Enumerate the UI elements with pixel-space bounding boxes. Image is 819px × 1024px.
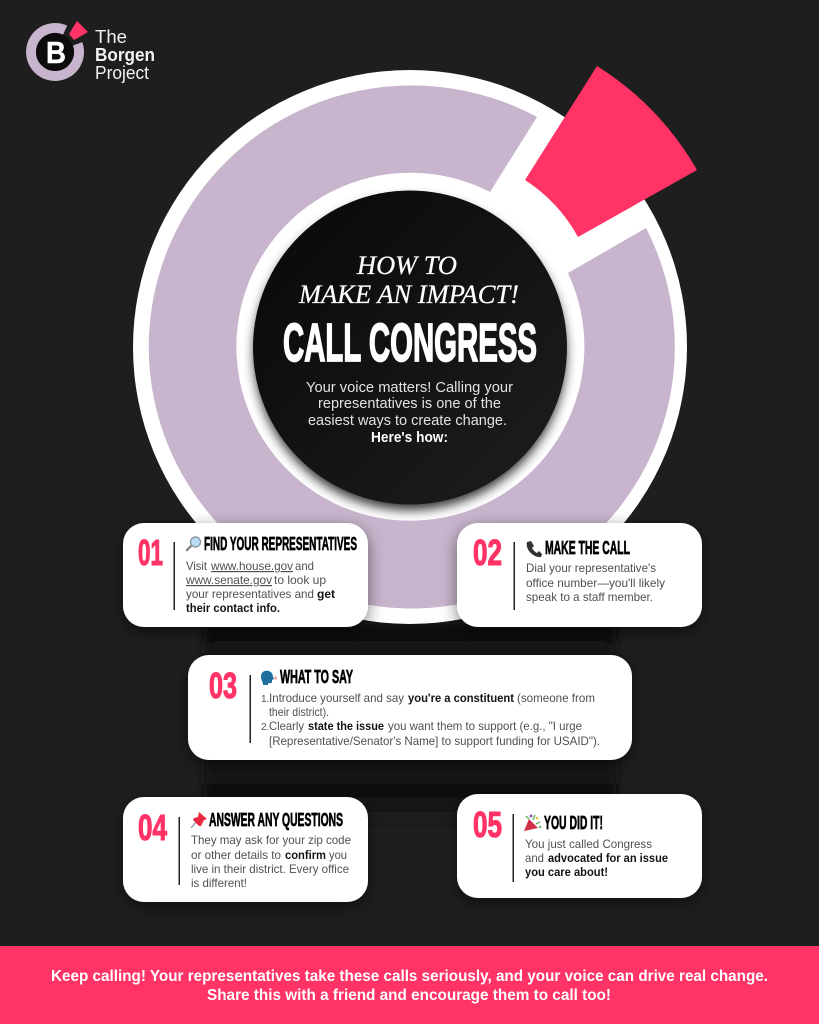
logo wordmark bbox=[95, 27, 155, 83]
numbered list: Introduce yourself and say bbox=[269, 692, 404, 705]
body text bbox=[191, 834, 351, 890]
intro text bbox=[306, 379, 513, 446]
divider bbox=[174, 542, 175, 610]
body text: get bbox=[317, 588, 335, 601]
body text: your representatives and bbox=[186, 588, 314, 601]
icon: telephone bbox=[527, 541, 542, 557]
numbered list: 2. bbox=[261, 722, 269, 733]
body text: to look up bbox=[274, 574, 327, 587]
body text: you care about! bbox=[525, 866, 608, 879]
logo wordmark: Project bbox=[95, 63, 149, 83]
lilac ring bbox=[149, 85, 675, 608]
body text: live in their district. Every office bbox=[191, 863, 349, 876]
card 05: you did it bbox=[457, 794, 702, 898]
card background bbox=[457, 794, 702, 898]
target graphic bbox=[133, 66, 697, 624]
icon: speaking head bbox=[261, 671, 277, 685]
card 04: answer any questions bbox=[123, 797, 368, 902]
headline: call congress: CALL CONGRESS bbox=[283, 313, 537, 373]
heading: MAKE THE CALL bbox=[545, 538, 630, 558]
body text: or other details to bbox=[191, 849, 281, 862]
card background bbox=[457, 523, 702, 627]
numbered list: (someone from bbox=[517, 692, 595, 705]
headline: how to make an impact bbox=[298, 251, 519, 309]
number: 05 bbox=[473, 804, 502, 845]
numbered list: you're a constituent bbox=[408, 692, 514, 705]
body text: office number—you'll likely bbox=[526, 577, 665, 590]
intro text: Here's how: bbox=[371, 429, 448, 446]
body text: Visit bbox=[186, 560, 208, 573]
divider bbox=[250, 675, 251, 743]
headline: how to make an impact: MAKE AN IMPACT! bbox=[298, 280, 519, 309]
card background bbox=[123, 797, 368, 902]
card background bbox=[188, 655, 632, 760]
icon: magnifying glass bbox=[187, 537, 200, 550]
numbered list: 1. bbox=[261, 694, 269, 705]
disc shadow bbox=[254, 198, 566, 510]
number: 01 bbox=[138, 532, 163, 573]
logo letter: B bbox=[46, 35, 66, 70]
card 03: what to say bbox=[188, 655, 632, 760]
body text bbox=[526, 562, 665, 604]
black centre disc bbox=[253, 190, 567, 504]
number: 04 bbox=[138, 807, 167, 848]
body text: advocated for an issue bbox=[548, 852, 668, 865]
body text: www.senate.gov bbox=[185, 574, 272, 587]
divider bbox=[512, 814, 514, 882]
number: 03 bbox=[209, 665, 237, 706]
outer white circle bbox=[133, 70, 687, 624]
intro text: easiest ways to create change. bbox=[308, 412, 507, 429]
card 02: make the call bbox=[457, 523, 702, 627]
logo bbox=[31, 21, 155, 83]
heading: YOU DID IT! bbox=[544, 813, 603, 833]
card 01: find your representatives bbox=[123, 523, 368, 627]
intro text: representatives is one of the bbox=[318, 395, 501, 412]
body text: www.house.gov bbox=[210, 560, 293, 573]
body text bbox=[185, 560, 335, 615]
body text: They may ask for your zip code bbox=[191, 834, 351, 847]
body text: you bbox=[329, 849, 347, 862]
banner text: Keep calling! Your representatives take these calls seriously, and your voice can drive real change. bbox=[51, 968, 768, 985]
logo wordmark: Borgen bbox=[95, 45, 155, 65]
numbered list: you want them to support (e.g., "I urge bbox=[388, 720, 582, 733]
banner text bbox=[51, 968, 768, 1004]
body text: You just called Congress bbox=[525, 838, 652, 851]
card background bbox=[123, 523, 368, 627]
divider bbox=[178, 817, 180, 885]
logo wordmark: The bbox=[95, 27, 127, 47]
numbered list bbox=[261, 692, 600, 748]
logo inner disc bbox=[36, 33, 74, 71]
banner background bbox=[0, 946, 819, 1024]
body text: their contact info. bbox=[186, 602, 280, 615]
body text bbox=[525, 838, 668, 879]
headline: how to make an impact: HOW TO bbox=[356, 251, 457, 280]
dark shadow behind the lower cards bbox=[204, 622, 616, 820]
body text: confirm bbox=[285, 849, 326, 862]
body text: Dial your representative's bbox=[526, 562, 656, 575]
red wedge bbox=[525, 66, 697, 237]
heading: ANSWER ANY QUESTIONS bbox=[209, 810, 343, 830]
logo ring bbox=[31, 28, 79, 76]
logo wedge bbox=[69, 21, 88, 40]
numbered list: their district). bbox=[269, 706, 329, 719]
icon: pushpin bbox=[191, 812, 207, 828]
body text: and bbox=[525, 852, 544, 865]
divider bbox=[514, 542, 515, 610]
body text: speak to a staff member. bbox=[526, 591, 653, 604]
number: 02 bbox=[473, 532, 502, 573]
numbered list: Clearly bbox=[269, 720, 304, 733]
numbered list: state the issue bbox=[308, 720, 384, 733]
heading: FIND YOUR REPRESENTATIVES bbox=[204, 534, 357, 554]
intro text: Your voice matters! Calling your bbox=[306, 379, 513, 396]
banner text: Share this with a friend and encourage them to call too! bbox=[207, 987, 611, 1004]
icon: party popper bbox=[524, 814, 541, 831]
footer banner bbox=[0, 946, 819, 1024]
body text: and bbox=[295, 560, 314, 573]
body text: is different! bbox=[191, 877, 247, 890]
heading: WHAT TO SAY bbox=[280, 667, 353, 687]
numbered list: [Representative/Senator's Name] to support funding for USAID"). bbox=[269, 735, 600, 748]
